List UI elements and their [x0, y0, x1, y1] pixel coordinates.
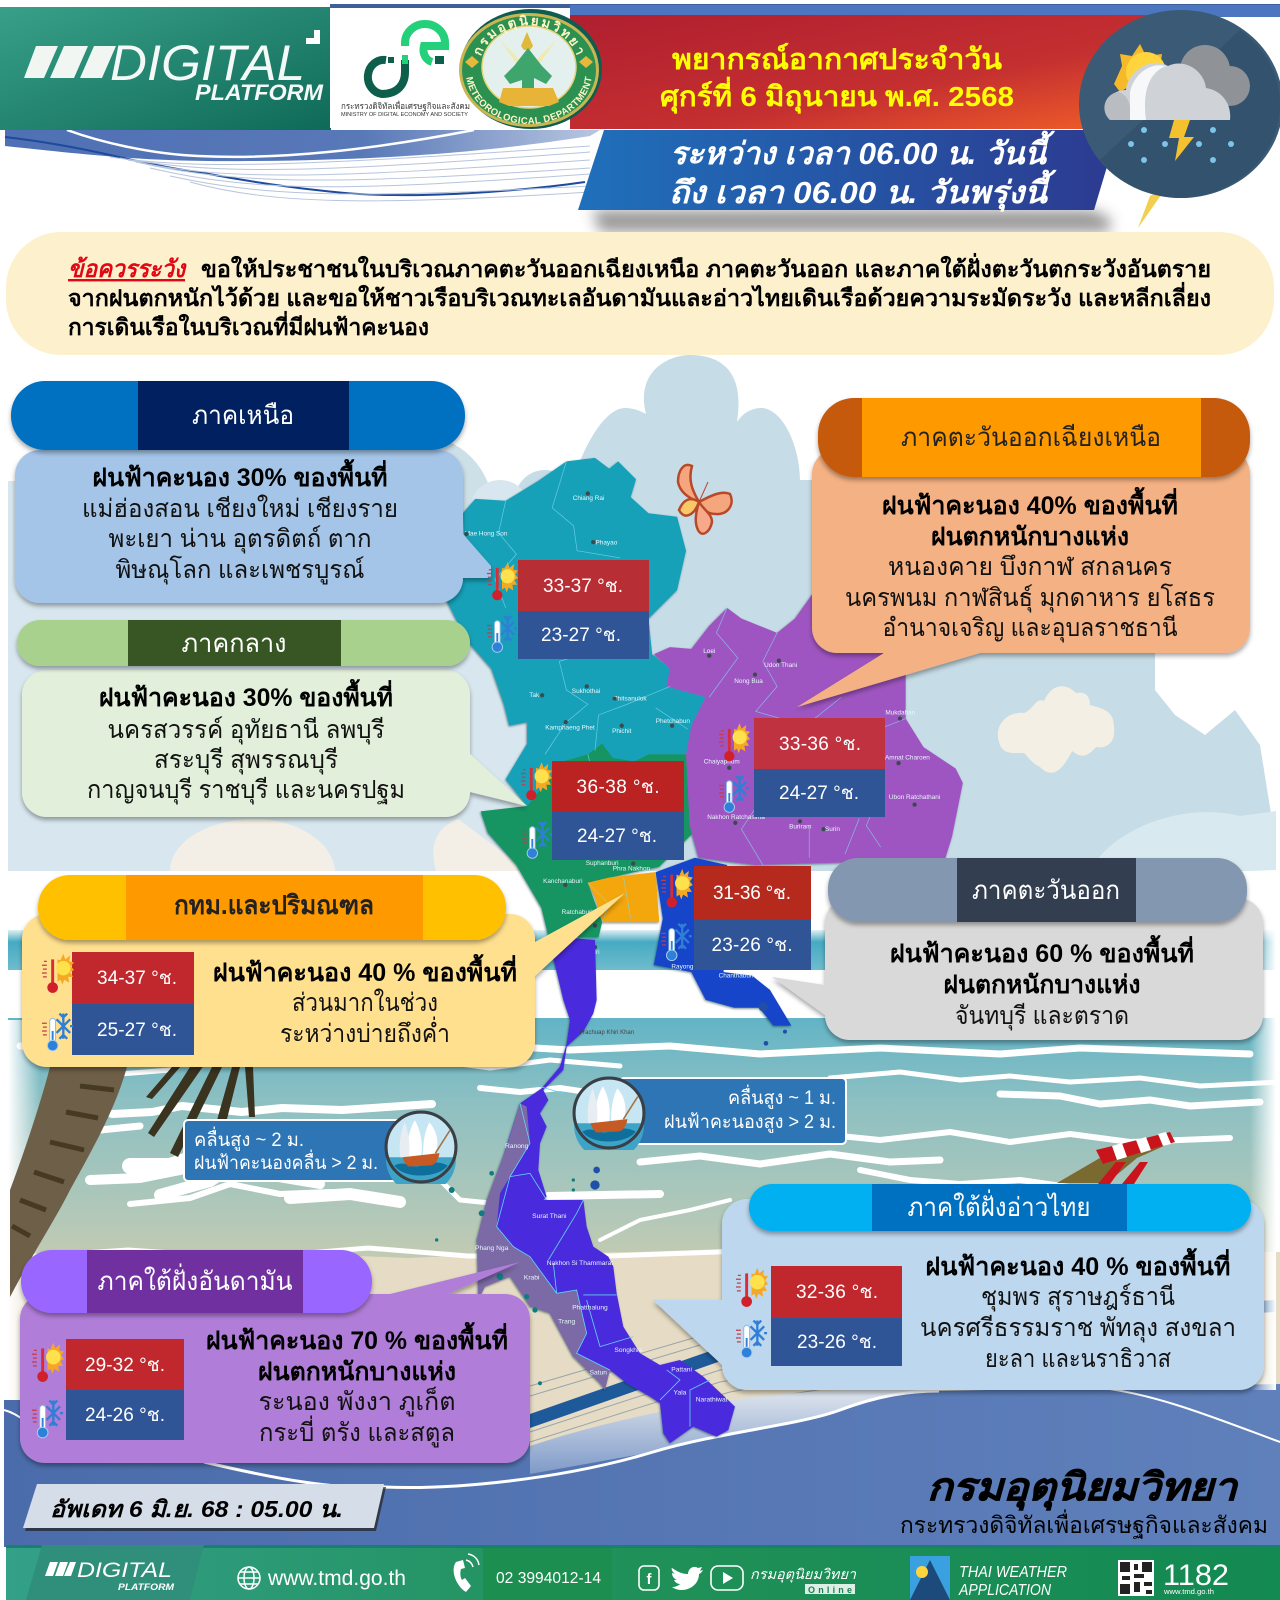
map: province labels: Phang Nga [475, 1245, 509, 1252]
map temperature: northeast [719, 718, 885, 817]
text block: นครศรีธรรมราช พัทลุง สงขลา [920, 1314, 1236, 1343]
seal: meteorological department: METEOROLOGICAL DEPARTMENT [466, 76, 592, 124]
panel: north [11, 381, 491, 603]
callout body [22, 670, 527, 817]
map: province labels: Phatthalung [572, 1304, 608, 1311]
temperature: high [771, 1266, 902, 1318]
map: province labels: Phetchaburi [565, 949, 600, 956]
text block: ฝนฟ้าคะนอง 60 % ของพื้นที่ [890, 934, 1194, 968]
text block: หนองคาย บึงกาฬ สกลนคร [888, 553, 1172, 581]
callout body [15, 450, 491, 603]
wave note: andaman [184, 1112, 456, 1194]
map: province labels: Surin [825, 826, 840, 833]
map: province labels: Trang [558, 1318, 576, 1325]
panel: warning notice [6, 232, 1274, 355]
text block: ฝนฟ้าคะนอง 40 % ของพื้นที่ [926, 1247, 1230, 1281]
icon: ship [574, 1078, 644, 1160]
temperature: low [72, 1004, 194, 1055]
warning label: ข้อควรระวัง [68, 256, 187, 283]
icon: cold thermometer [32, 1401, 63, 1438]
map temperature: north [487, 560, 649, 659]
hotline: 1182 [1163, 1559, 1229, 1592]
map: greater bangkok [588, 872, 659, 922]
time line 2: ถึง เวลา 06.00 น. วันพรุ่งนี้ [669, 169, 1058, 212]
map: province labels: Phra Nakhon [613, 865, 651, 872]
social icons: กรมอุตุนิยมวิทยา [750, 1566, 857, 1583]
heading [17, 620, 470, 666]
map: province labels: Prachuap Khiri Khan [579, 1030, 634, 1036]
icon: cold thermometer [42, 1014, 73, 1051]
weather app: APPLICATION [958, 1582, 1051, 1599]
map: province labels: Tak [529, 692, 540, 699]
beach umbrella [1057, 1132, 1175, 1184]
map of Thailand [435, 458, 963, 1443]
text block [920, 1247, 1236, 1373]
map: province labels: Ranong [505, 1143, 529, 1150]
text block: ฝนฟ้าคะนอง 40% ของพื้นที่ [882, 486, 1178, 520]
top swoosh [5, 130, 600, 201]
logo slashes [24, 46, 116, 78]
panel: south gulf [653, 1184, 1264, 1390]
wave note text: คลื่นสูง ~ 1 ม. [728, 1084, 836, 1109]
heading [21, 1250, 372, 1313]
map: province labels: Satun [590, 1370, 607, 1377]
map: province labels: Loei [703, 648, 715, 655]
map temperature: east [661, 866, 811, 970]
seal: meteorological department [459, 9, 602, 129]
icon: butterfly [678, 465, 732, 534]
map: central region [481, 744, 693, 937]
heading [749, 1184, 1251, 1231]
map: province labels: Narathiwat [696, 1397, 728, 1404]
header band: ministry logo: MINISTRY OF DIGITAL ECONOMY AND SOCIETY [341, 112, 468, 118]
temperature: low: 24-26 °ช. [85, 1405, 165, 1426]
map: province labels: Phayao [596, 539, 618, 546]
map: province labels [475, 1030, 728, 1404]
heading: กทม.และปริมณฑล [174, 890, 374, 920]
text block: จันทบุรี และตราด [955, 1002, 1129, 1031]
warning text: จากฝนตกหนักไว้ด้วย และขอให้ชาวเรือบริเวณทะเลอันดามันและอ่าวไทยเดินเรือด้วยความระมัดระวัง และหลีกเลี่ยง [68, 281, 1211, 311]
text block: อำนาจเจริญ และอุบลราชธานี [882, 614, 1178, 643]
header band: title ribbon [570, 15, 1160, 129]
phone [454, 1548, 612, 1600]
text block: ฝนตกหนักบางแห่ง [931, 523, 1129, 551]
heading [828, 858, 1247, 922]
text block: นครสวรรค์ อุทัยธานี ลพบุรี [108, 716, 384, 745]
map temperature: central: 24-27 °ช. [577, 826, 657, 847]
panel: northeast [797, 398, 1250, 707]
text block [87, 678, 405, 805]
text block: พิษณุโลก และเพชรบูรณ์ [116, 555, 364, 585]
text block [890, 934, 1194, 1031]
map: province labels: Mukdahan [885, 709, 916, 716]
heading: ภาคกลาง [182, 628, 286, 658]
heading [38, 875, 506, 940]
weather app [910, 1556, 1067, 1600]
hotline [1118, 1559, 1229, 1596]
map temperature: north: 33-37 °ช. [543, 576, 623, 597]
cloud: cream [998, 686, 1114, 773]
text block: ฝนฟ้าคะนอง 30% ของพื้นที่ [99, 678, 393, 712]
sky lobes behind map [343, 435, 493, 585]
text block: ชุมพร สุราษฎร์ธานี [981, 1283, 1175, 1312]
heading: ภาคตะวันออกเฉียงเหนือ [901, 422, 1161, 452]
map: province labels: Kanchanaburi [543, 878, 583, 885]
map temperature: east: 23-26 °ช. [712, 935, 792, 956]
heading: ภาคเหนือ [192, 400, 294, 430]
temperature: high [66, 1339, 184, 1390]
warning text [68, 252, 1211, 340]
wave note text [194, 1126, 378, 1174]
title line 2: ศุกร์ที่ 6 มิถุนายน พ.ศ. 2568 [660, 76, 1014, 114]
panel: east [772, 858, 1263, 1040]
map: province labels: Nakhon Si Thammarat [547, 1260, 613, 1267]
sand [8, 1248, 1280, 1452]
time line 1: ระหว่าง เวลา 06.00 น. วันนี้ [670, 130, 1056, 171]
wave note text: คลื่นสูง ~ 2 ม. [194, 1126, 304, 1151]
text block: ฝนฟ้าคะนอง 40 % ของพื้นที่ [213, 953, 517, 987]
header band: digital platform logo: PLATFORM [195, 80, 324, 105]
text block: ส่วนมากในช่วง [292, 988, 438, 1017]
ministry name: กระทรวงดิจิทัลเพื่อเศรษฐกิจและสังคม [900, 1509, 1268, 1539]
map temperature: northeast: 24-27 °ช. [779, 783, 859, 804]
hotline: www.tmd.go.th [1163, 1589, 1214, 1596]
wave note text: ฝนฟ้าคะนองคลื่น > 2 ม. [194, 1149, 378, 1174]
text block: กระบี่ ตรัง และสตูล [259, 1415, 455, 1448]
map: islands [435, 1145, 587, 1385]
weather app: THAI WEATHER [959, 1564, 1067, 1581]
map temperature: central [521, 761, 684, 860]
wave note text: ฝนฟ้าคะนองสูง > 2 ม. [664, 1112, 836, 1133]
map temperature: east: 31-36 °ช. [713, 883, 791, 904]
map: province labels: Nong Bua [734, 678, 763, 685]
map: upper peninsula [548, 936, 597, 1000]
callout body [653, 1199, 1264, 1390]
map: upper regions [447, 458, 963, 1026]
callout body [22, 893, 625, 1067]
warning text: การเดินเรือในบริเวณที่มีฝนฟ้าคะนอง [68, 310, 429, 340]
top right strip [330, 4, 1280, 17]
temperature: low [66, 1390, 184, 1440]
text block [845, 486, 1215, 643]
map: province labels: Buriram [789, 824, 812, 831]
temperature: low: 25-27 °ช. [97, 1020, 177, 1041]
panel: bangkok and vicinity [22, 875, 625, 1067]
icon: hot thermometer [32, 1343, 64, 1382]
website: www.tmd.go.th [267, 1567, 406, 1590]
map: province labels: Yala [674, 1390, 687, 1397]
panel: central [17, 620, 527, 817]
palm tree [10, 1065, 255, 1297]
map: province labels [465, 495, 940, 979]
wave note text [664, 1084, 836, 1133]
text block: ฝนตกหนักบางแห่ง [944, 971, 1140, 999]
map: landmass with shadow [447, 458, 963, 1026]
map: province labels: Nakhon Ratchasima [707, 814, 765, 821]
icon: cold thermometer [736, 1321, 767, 1358]
map temperature: northeast: 33-36 °ช. [779, 734, 861, 755]
footer bar [6, 1545, 1280, 1600]
text block: ระนอง พังงา ภูเก็ต [258, 1386, 456, 1417]
footer logo: DIGITAL [77, 1559, 172, 1582]
map: province labels: Udon Thani [764, 662, 797, 669]
seal: meteorological department: กรมอุตุนิยมวิทยา [474, 14, 583, 56]
map: northeast region [654, 594, 963, 865]
temperature: high: 29-32 °ช. [85, 1355, 165, 1376]
map: province labels: Ratchaburi [562, 909, 593, 916]
map: east region [654, 858, 791, 1026]
wave note: gulf [574, 1078, 846, 1160]
temperature: low: 23-26 °ช. [797, 1332, 877, 1353]
map: province labels: Kamphaeng Phet [545, 724, 595, 731]
time ribbon [578, 130, 1118, 232]
text block: ฝนฟ้าคะนอง 30% ของพื้นที่ [92, 458, 388, 492]
map: province labels: Pattani [671, 1366, 693, 1373]
heading: ภาคตะวันออก [972, 875, 1120, 905]
panel: south andaman [20, 1250, 530, 1463]
map: province labels: Krabi [524, 1274, 540, 1281]
sky [8, 481, 560, 871]
update stamp [23, 1484, 386, 1531]
map temperature: north: 23-27 °ช. [541, 625, 621, 646]
text block: ฝนตกหนักบางแห่ง [258, 1358, 456, 1386]
text block [82, 458, 398, 585]
callout body [20, 1262, 530, 1463]
map: province lines [495, 461, 906, 922]
text block: กาญจนบุรี ราชบุรี และนครปฐม [87, 776, 405, 805]
map: province labels: Ubon Ratchathani [889, 794, 940, 801]
heading: ภาคใต้ฝั่งอันดามัน [98, 1263, 293, 1296]
lower cream clouds [170, 819, 335, 871]
map: province labels: Phetchabun [656, 718, 690, 725]
heading: ภาคใต้ฝั่งอ่าวไทย [908, 1189, 1090, 1222]
sea [8, 871, 1276, 931]
icon: ship [386, 1112, 456, 1194]
text block: สระบุรี สุพรรณบุรี [154, 746, 338, 775]
title line 1: พยากรณ์อากาศประจำวัน [672, 42, 1002, 76]
map: province labels: Mae Hong Son [465, 531, 508, 538]
header band: ministry logo: กระทรวงดิจิทัลเพื่อเศรษฐกิจและสังคม [341, 100, 470, 112]
text block: ยะลา และนราธิวาส [985, 1345, 1171, 1373]
temperature: high [72, 952, 194, 1004]
lower wave [4, 1384, 1280, 1547]
text block [213, 953, 517, 1048]
map: andaman region [477, 1103, 610, 1390]
icon: storm weather badge [1079, 10, 1280, 228]
map: province labels: Songkhla [614, 1347, 642, 1354]
map: province labels: Rayong [671, 964, 694, 971]
temperature: low [771, 1318, 902, 1366]
map: peninsula [435, 936, 787, 1443]
warning text: ขอให้ประชาชนในบริเวณภาคตะวันออกเฉียงเหนือ ภาคตะวันออก และภาคใต้ฝั่งตะวันตกระวังอันตราย [201, 252, 1211, 282]
temperature: high: 34-37 °ช. [97, 968, 177, 989]
phone: 02 3994012-14 [496, 1570, 601, 1587]
map: province labels: Phitsanulok [613, 696, 647, 703]
map temperature: central: 36-38 °ช. [576, 777, 660, 798]
left and right image fade [8, 1020, 40, 1400]
map: province labels: Suphanburi [586, 860, 619, 867]
header band: digital platform logo [0, 7, 331, 130]
text block: ฝนฟ้าคะนอง 70 % ของพื้นที่ [206, 1321, 508, 1355]
map: province labels: Surat Thani [532, 1213, 567, 1220]
callout body [797, 449, 1250, 707]
footer logo: PLATFORM [118, 1582, 175, 1593]
icon: hot thermometer [42, 954, 74, 993]
text block: แม่ฮ่องสอน เชียงใหม่ เชียงราย [82, 494, 398, 523]
map: province labels: Chanthaburi [719, 972, 753, 979]
social icons: f [646, 1571, 652, 1588]
header band: ministry logo [330, 8, 570, 128]
map: province labels: Amnat Charoen [885, 755, 930, 762]
map: province labels: Chiang Rai [573, 495, 604, 502]
footer logo [26, 1545, 204, 1600]
department name: กรมอุตุนิยมวิทยา [927, 1467, 1239, 1511]
heading [818, 398, 1250, 477]
text block: พะเยา น่าน อุตรดิตถ์ ตาก [108, 525, 372, 554]
map: province labels: Phichit [612, 728, 632, 735]
map: gulf south region [477, 1000, 735, 1443]
callout body [772, 898, 1263, 1040]
social icons [639, 1566, 857, 1595]
map: province labels: Sukhothai [572, 688, 600, 695]
temperature: high: 32-36 °ช. [796, 1282, 878, 1303]
text block [206, 1321, 508, 1448]
map: province labels: Chaiyaphum [704, 759, 740, 766]
heading [11, 381, 465, 450]
header band: digital platform logo: DIGITAL [110, 35, 305, 91]
social icons: Online [808, 1585, 852, 1595]
map: province lines [497, 1087, 710, 1427]
text block: นครพนม กาฬสินธุ์ มุกดาหาร ยโสธร [845, 583, 1215, 613]
icon: hot thermometer [736, 1268, 768, 1307]
update stamp: อัพเดท 6 มิ.ย. 68 : 05.00 น. [50, 1496, 343, 1522]
map: north region [447, 458, 706, 806]
text block: ระหว่างบ่ายถึงค่ำ [280, 1016, 450, 1048]
